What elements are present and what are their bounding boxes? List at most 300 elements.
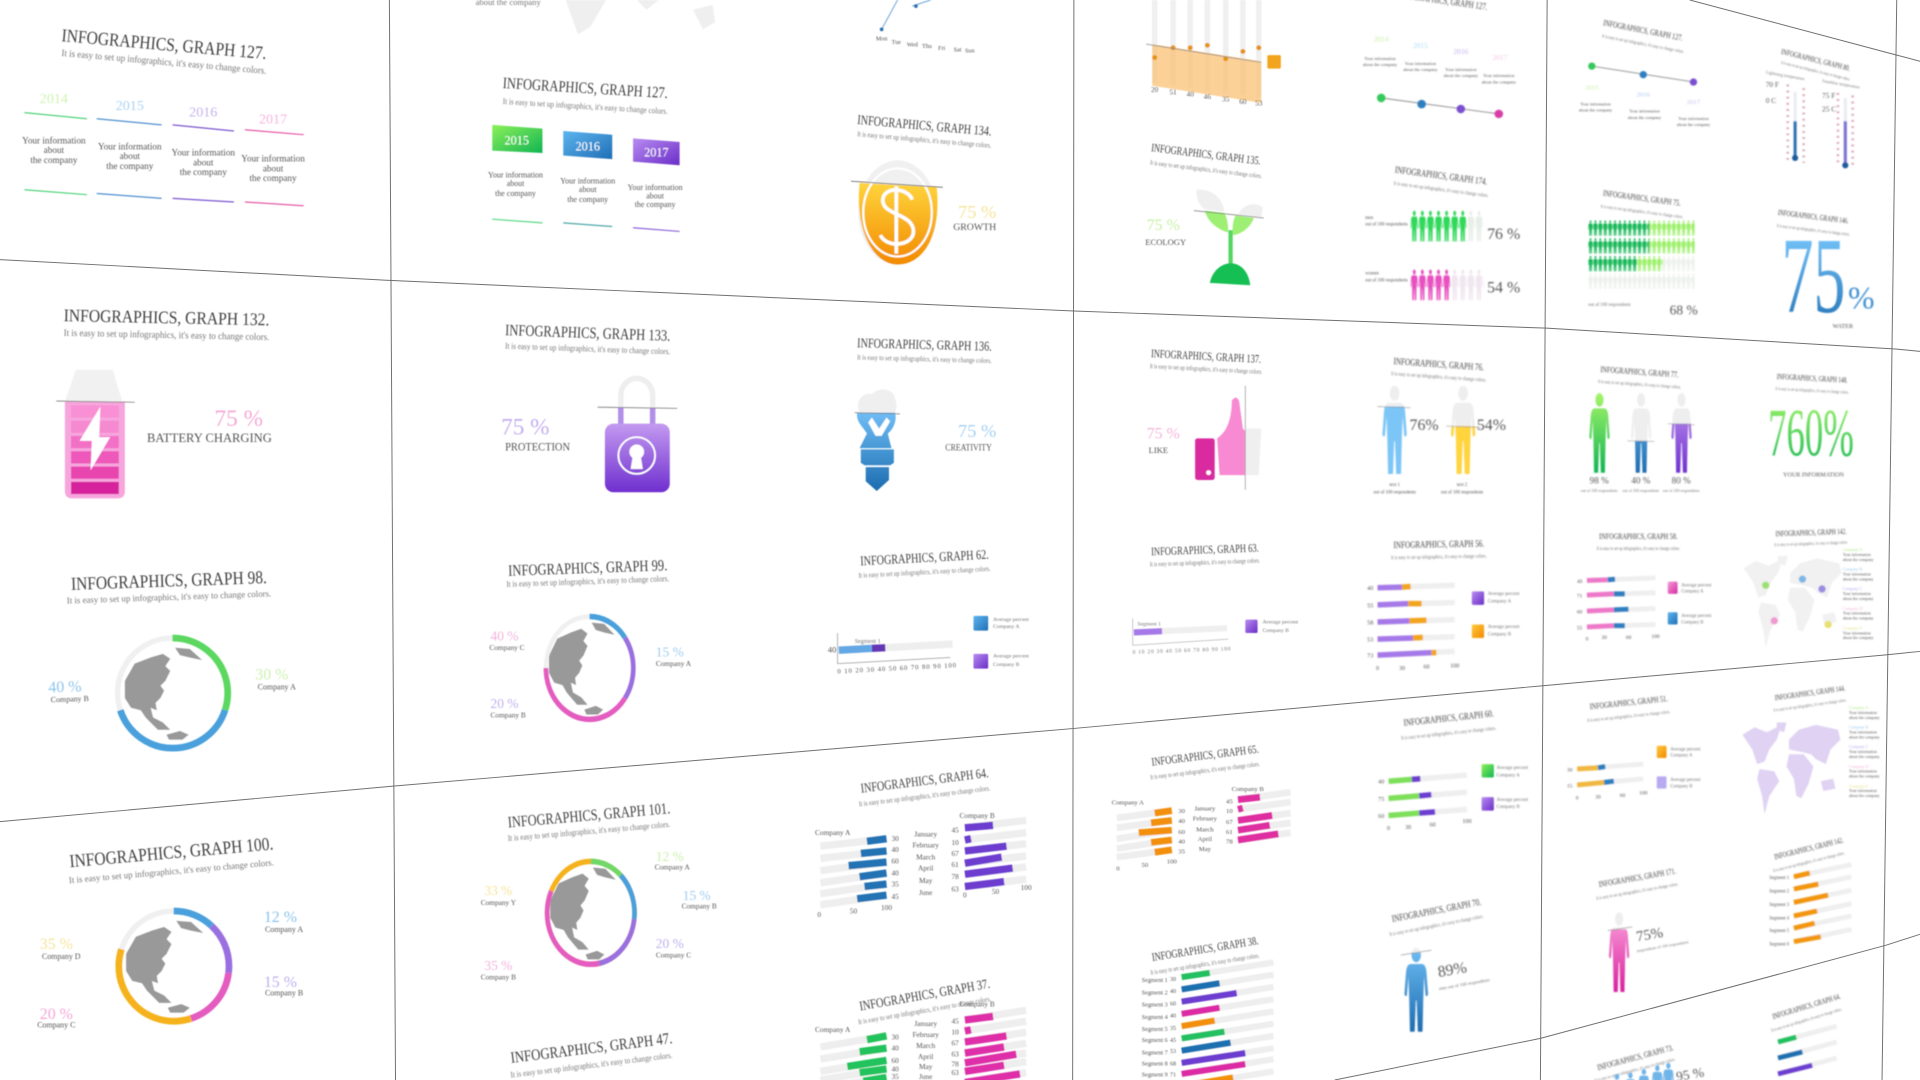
axis and value labels: 45 — [891, 892, 899, 901]
values and labels: 12 % — [656, 849, 684, 864]
axis labels: 75 — [1378, 797, 1384, 803]
panel: graph 134 coin — [851, 112, 996, 264]
chart: cropped line chart top: Tue — [892, 40, 901, 46]
panel: graph 132 battery — [56, 305, 272, 498]
subtitle: It is easy to set up infographics, it's easy to change colors. — [858, 564, 991, 580]
values and labels: Company C — [656, 951, 691, 960]
panel: graph 64 small bars — [1771, 992, 1843, 1074]
axis labels: 60 — [1378, 814, 1384, 820]
heading: INFOGRAPHICS, GRAPH 142. — [1773, 836, 1844, 861]
pale years: 2016 — [1637, 92, 1651, 99]
captions — [1373, 483, 1483, 495]
panel: graph 58 stacked bars — [1577, 531, 1712, 642]
data points — [1152, 43, 1261, 61]
values and labels: 35 % — [484, 958, 512, 973]
subtitle: It is easy to set up infographics, it's easy to change colors. — [1780, 60, 1851, 83]
panel: graph 133 padlock — [501, 322, 677, 492]
row labels: Segment 5 — [1142, 1027, 1168, 1033]
axis and value labels: 60 — [1178, 829, 1186, 836]
box captions: the company — [495, 189, 536, 198]
people: men 76 percent — [1411, 211, 1483, 242]
pale years — [1585, 84, 1701, 106]
heading: INFOGRAPHICS, GRAPH 142. — [1775, 527, 1847, 538]
legend: Average percent — [1681, 614, 1712, 619]
chart: cropped line chart top: Sat — [954, 47, 962, 53]
axis and value labels: January — [914, 1019, 937, 1028]
people row — [1611, 1063, 1674, 1080]
axis and value labels: 100 — [1021, 883, 1032, 892]
heading: INFOGRAPHICS, GRAPH 65. — [1151, 743, 1259, 769]
value: ecology: 75 % — [1147, 217, 1180, 234]
subtitle: It is easy to set up infographics, it's easy to change colors. — [1391, 553, 1487, 561]
axis and value labels: 50 — [992, 887, 1000, 896]
legend — [1482, 764, 1529, 811]
map legend: Company E — [1843, 625, 1863, 630]
axis and value labels: April — [1198, 836, 1212, 843]
axis and value labels: 100 — [881, 903, 892, 912]
axis and value labels: 10 — [1226, 808, 1233, 815]
orange area — [1152, 44, 1261, 103]
subtitle: It is easy to set up infographics, it's easy to change colors. — [857, 352, 992, 365]
values and captions: out of 100 respondents — [1663, 488, 1700, 493]
subtitle: It is easy to set up infographics, it's easy to change colors. — [510, 1050, 673, 1080]
information text: about — [193, 157, 214, 167]
axis labels — [1367, 586, 1459, 672]
bar chart: Segment 1 — [855, 639, 881, 645]
heading: INFOGRAPHICS, GRAPH 64. — [860, 765, 989, 796]
map legend: about the company — [1843, 635, 1874, 640]
row labels: Segment 3 — [1142, 1003, 1168, 1009]
panel: graph 142 orange bars — [1769, 836, 1851, 947]
value: 68 percent: 68 % — [1670, 303, 1698, 318]
legend: Company B — [993, 662, 1020, 668]
map legend: Company A — [1849, 705, 1868, 710]
values and labels: Company A — [655, 862, 691, 871]
panel: graph 74 people rows — [1365, 165, 1520, 301]
values and labels: 15 % — [264, 974, 297, 991]
legend: Average percent — [1488, 592, 1520, 597]
panel: graph 63 bar — [1133, 542, 1299, 656]
axis and value labels: 60 — [891, 1056, 899, 1065]
year labels: 2017 — [259, 112, 287, 128]
values and labels: 20 % — [40, 1006, 73, 1023]
axis labels: 40 — [1367, 586, 1373, 592]
captions: out of 100 respondents — [1441, 490, 1483, 495]
bar chart: orange — [1117, 811, 1172, 857]
legend: Company A — [1496, 773, 1520, 778]
axis and value labels: 30 — [1178, 808, 1186, 815]
heading: INFOGRAPHICS, GRAPH 174. — [1394, 165, 1488, 188]
heading: INFOGRAPHICS, GRAPH 132. — [63, 305, 270, 329]
panel: graph 144 purple map — [1742, 684, 1880, 814]
subtitle: It is easy to set up infographics, it's easy to change colors. — [1401, 725, 1497, 742]
value: company A: 30 % — [255, 667, 288, 684]
value: 75 percent: 75% — [1635, 925, 1664, 945]
map legend: Your information — [1849, 749, 1877, 754]
year labels: 2015 — [116, 98, 144, 114]
axis and value labels: 40 — [1178, 839, 1186, 846]
label: company A: Company A — [258, 682, 296, 691]
row labels: men — [1365, 216, 1374, 221]
axis labels: 40 — [1187, 90, 1194, 99]
axis labels: 53 — [1367, 638, 1373, 644]
map legend: Your information — [1843, 630, 1871, 635]
box captions: Your information — [628, 183, 683, 192]
heading: INFOGRAPHICS, GRAPH 137. — [1151, 347, 1261, 366]
information text — [22, 135, 305, 183]
axis and value labels: 40 — [891, 869, 899, 878]
heading: INFOGRAPHICS, GRAPH 70. — [1391, 897, 1482, 925]
value: 76 percent: 76% — [1409, 417, 1439, 434]
map legend: Company B — [1843, 567, 1863, 572]
subtitle: It is easy to set up infographics, it's easy to change colors. — [1774, 541, 1848, 548]
subtitle: It is easy to set up infographics, it's easy to change colors. — [1597, 547, 1680, 552]
legend: Company B — [1496, 805, 1521, 810]
figure: green person — [1589, 393, 1610, 473]
caption: men out of 100 respondents — [1439, 978, 1490, 992]
axis labels: 0 — [1576, 796, 1579, 802]
row labels: Segment 4 — [1142, 1015, 1168, 1021]
map legend: about the company — [1843, 576, 1874, 581]
map legend: about the company — [1843, 557, 1874, 562]
row labels: Segment 7 — [1142, 1050, 1168, 1056]
axis labels: 100 — [1462, 819, 1472, 825]
values and labels: 12 % — [264, 909, 297, 926]
map legend: about the company — [1849, 715, 1880, 720]
legend: Average percent — [1670, 748, 1701, 753]
label: protection: PROTECTION — [505, 441, 571, 454]
value: creativity: 75 % — [958, 421, 996, 441]
axis and value labels: 61 — [1226, 829, 1233, 836]
bar chart: 0 10 20 30 40 50 60 70 80 90 100 — [1133, 646, 1231, 656]
axis labels: 51 — [1169, 87, 1177, 96]
map legend: Your information — [1843, 572, 1871, 577]
pale years: 2015 — [1413, 41, 1428, 50]
axis and value labels: 63 — [951, 1068, 959, 1077]
subtitle: It is easy to set up infographics, it's easy to change colors. — [1150, 952, 1260, 977]
axis and value labels: 0 — [1116, 866, 1120, 873]
year boxes: 2015 — [505, 133, 529, 147]
values and labels: 15 % — [656, 644, 684, 659]
information text: Your information — [171, 148, 235, 158]
axis and value labels: 40 — [891, 845, 899, 854]
subtitle: It is easy to set up infographics, it's easy to change colors. — [1150, 363, 1263, 376]
panel: graph 127 coloured boxes — [488, 75, 683, 223]
panel: graph 37 double bars — [815, 976, 1026, 1080]
axis and value labels: March — [916, 853, 936, 862]
subtitle: It is easy to set up infographics, it's easy to change colors. — [68, 857, 274, 885]
values and labels: Company A — [656, 659, 692, 668]
axis and value labels: 10 — [951, 838, 959, 847]
row labels: out of 100 respondents — [1365, 279, 1408, 284]
bar chart: 0 10 20 30 40 50 60 70 80 90 100 — [837, 662, 957, 675]
information text: Your information — [98, 141, 162, 151]
legend — [1668, 582, 1712, 625]
bar chart: 40 — [828, 645, 836, 655]
information text: about — [120, 151, 140, 161]
heading: INFOGRAPHICS, GRAPH 127. — [502, 75, 668, 102]
captions: Your information — [1678, 116, 1709, 121]
heading: INFOGRAPHICS, GRAPH 100. — [69, 833, 274, 871]
right thermometer — [1822, 78, 1860, 169]
bar chart — [1577, 764, 1643, 785]
box captions: about — [507, 179, 525, 188]
panel: graph 73 people — [1594, 1042, 1705, 1080]
axis and value labels: January — [1194, 806, 1216, 813]
captions: Your information — [1483, 73, 1515, 78]
bar chart — [1182, 962, 1273, 1080]
row labels: 71 — [1170, 1072, 1176, 1078]
legend: Average percent — [1496, 766, 1529, 771]
axis and value labels: 50 — [850, 906, 857, 915]
axis labels: 30 — [1567, 767, 1573, 773]
captions: text 1 — [1389, 483, 1401, 488]
subtitle: It is easy to set up infographics, it's easy to change colors. — [67, 588, 271, 606]
values and captions: 80 % — [1672, 476, 1691, 486]
axis and value labels: February — [912, 1030, 939, 1039]
subtitle: It is easy to set up infographics, it's easy to change colors. — [858, 783, 991, 808]
figure: pink person — [1608, 912, 1632, 992]
year boxes: 2016 — [576, 140, 600, 154]
heading: INFOGRAPHICS, GRAPH 76. — [1393, 356, 1484, 373]
heading: INFOGRAPHICS, GRAPH 133. — [505, 322, 671, 345]
map legend: Your information — [1849, 710, 1877, 715]
row labels: Segment 9 — [1142, 1072, 1168, 1078]
bar chart: magenta — [1238, 792, 1291, 840]
heading: INFOGRAPHICS, GRAPH 144. — [1774, 684, 1846, 702]
information text: the company — [180, 167, 227, 177]
row labels: 40 — [1170, 1014, 1176, 1020]
values and labels: 15 % — [683, 888, 711, 903]
captions: text 2 — [1457, 483, 1468, 488]
panel: graph 99 globe — [489, 557, 692, 720]
value: 76 percent: 76 % — [1487, 226, 1520, 243]
map legend: Company C — [1849, 744, 1869, 749]
subtitle: It is easy to set up infographics, it's easy to change colors. — [1150, 761, 1260, 781]
axis labels: 0 — [1586, 636, 1589, 642]
axis labels: 20 — [1151, 85, 1159, 94]
chart: cropped line chart top: Sun — [965, 49, 975, 55]
captions: Your information — [1364, 56, 1396, 61]
heading: INFOGRAPHICS, GRAPH 56. — [1393, 539, 1484, 551]
axis labels: 100 — [1450, 663, 1459, 669]
timeline — [1377, 94, 1503, 118]
axis and value labels: March — [916, 1041, 936, 1050]
row labels: 60 — [1170, 1001, 1176, 1007]
bar chart: company B — [965, 820, 1026, 887]
captions: about the company — [1363, 62, 1398, 67]
heading: INFOGRAPHICS, GRAPH 51. — [1589, 693, 1668, 711]
captions: Your information — [1629, 109, 1660, 114]
map legend: Company D — [1849, 764, 1869, 769]
values and labels: Company B — [491, 711, 526, 720]
row labels: Segment 1 — [1142, 978, 1168, 984]
legend: Average percent — [993, 654, 1029, 660]
panel: graph 136 bulb — [855, 335, 996, 491]
heading: INFOGRAPHICS, GRAPH 58. — [1599, 531, 1678, 541]
panel: graph 100 globe — [37, 833, 303, 1029]
axis and value labels: February — [912, 840, 939, 849]
axis and value labels: Company B — [1232, 786, 1264, 793]
information text: Your information — [241, 154, 305, 164]
figure: blue person — [1378, 386, 1411, 474]
heading: INFOGRAPHICS, GRAPH 134. — [857, 112, 992, 139]
subtitle: It is easy to set up infographics, it's easy to change colors. — [502, 96, 668, 116]
axis and value labels: Company A — [1112, 799, 1144, 806]
panel: graph 135 plant — [1145, 141, 1264, 285]
heading: INFOGRAPHICS, GRAPH 38. — [1151, 934, 1259, 964]
panel: graph 60 stacked bars — [1378, 709, 1529, 832]
panel: timeline four dots — [1363, 0, 1517, 118]
heading: INFOGRAPHICS, GRAPH 171. — [1598, 866, 1677, 889]
map legend: Company E — [1849, 783, 1869, 788]
bar chart: Segment 1 — [1138, 622, 1161, 628]
panel: graph 148 big value — [1768, 372, 1854, 478]
pale years: 2016 — [1453, 47, 1468, 56]
subtitle: graph 127: It is easy to set up infographics, it's easy to change colors. — [61, 48, 267, 77]
people: women 54 percent — [1411, 269, 1484, 301]
map legend: about the company — [1849, 734, 1880, 739]
chart: cropped line chart top — [876, 0, 975, 55]
big value: 75: 75 — [1782, 217, 1845, 336]
label: water: WATER — [1833, 324, 1854, 330]
value: battery charging: 75 % — [215, 406, 263, 432]
map legend: Company A — [1843, 547, 1862, 552]
axis labels — [1151, 85, 1263, 107]
subtitle: It is easy to set up infographics, it's easy to change colors. — [1587, 710, 1670, 724]
subtitle: It is easy to set up infographics, it's easy to change colors. — [1602, 34, 1684, 55]
axis and value labels: 40 — [891, 1044, 899, 1053]
panel: graph 127 three dots — [1579, 17, 1711, 127]
axis and value labels: 30 — [891, 834, 899, 843]
vertical tracks — [1155, 0, 1259, 98]
information text: the company — [30, 155, 78, 165]
axis labels: 100 — [1651, 634, 1660, 640]
subtitle: It is easy to set up infographics, it's easy to change colors. — [1775, 387, 1849, 396]
map legend: about the company — [1849, 793, 1880, 798]
axis and value labels: Company A — [815, 828, 851, 837]
icon: padlock — [598, 378, 677, 492]
label: creativity: CREATIVITY — [945, 443, 992, 454]
figure: blue person — [1401, 948, 1431, 1032]
map legend: about the company — [1849, 754, 1880, 759]
caption: respondents of 100 respondents — [1636, 939, 1689, 953]
axis and value labels: May — [919, 1062, 933, 1071]
subtitle: It is easy to set up infographics, it's easy to change colors. — [64, 328, 269, 343]
heading: INFOGRAPHICS, GRAPH 80. — [1780, 47, 1851, 73]
axis and value labels: 35 — [891, 880, 899, 889]
bar chart — [1389, 775, 1467, 816]
map legend: Company B — [1849, 725, 1869, 730]
percent sign: % — [1848, 281, 1874, 316]
information text: about — [263, 163, 284, 173]
panel: graph 75 people grid — [1588, 188, 1698, 318]
icon: sprout — [1194, 190, 1264, 285]
year labels: 2016 — [189, 104, 217, 120]
axis and value labels: 61 — [951, 860, 959, 869]
bar chart — [1133, 618, 1231, 656]
subtitle: It is easy to set up infographics, it's easy to change colors. — [1150, 160, 1263, 180]
axis labels: 60 — [1577, 609, 1583, 615]
panel: graph 76 figures — [1373, 356, 1506, 495]
axis labels: 60 — [1626, 635, 1632, 641]
chart: cropped line chart top: Fri — [938, 46, 945, 52]
map legend: Company C — [1843, 586, 1863, 591]
figure: blue person — [1627, 393, 1654, 473]
box captions: Your information — [560, 177, 615, 186]
map legend: Your information — [1843, 591, 1871, 596]
map legend: about the company — [1843, 616, 1874, 621]
right thermometer: Sunshine temperature — [1822, 78, 1860, 90]
panel: graph 56 stacked bars — [1367, 539, 1520, 672]
legend: Average percent — [1670, 778, 1701, 783]
row labels: Segment 3 — [1769, 903, 1790, 908]
captions: Your information — [1580, 101, 1612, 106]
axis and value labels: 45 — [951, 826, 959, 835]
axis labels: 60 — [1239, 97, 1247, 106]
axis labels: 60 — [1620, 793, 1625, 799]
captions: about the company — [1403, 67, 1438, 72]
row labels — [1365, 216, 1408, 284]
map legend: Company D — [1843, 606, 1863, 611]
label: company B: Company B — [51, 694, 89, 704]
chart: cropped line chart top: Mon — [876, 36, 887, 42]
map legend: Your information — [1849, 788, 1877, 793]
legend — [1245, 619, 1299, 634]
axis labels: 60 — [1423, 665, 1430, 671]
panel: graph 70 figure — [1389, 897, 1490, 1032]
row labels: Segment 2 — [1769, 890, 1790, 895]
bottom rules — [492, 219, 542, 223]
subtitle: It is easy to set up infographics, it's easy to change colors. — [1598, 380, 1681, 391]
bar chart: company B — [965, 1010, 1026, 1080]
axis labels — [1577, 579, 1660, 642]
values and labels — [481, 849, 717, 982]
row labels: 68 — [1170, 1061, 1176, 1067]
box captions: the company — [635, 200, 676, 209]
value: company B: 40 % — [48, 678, 82, 696]
row labels: Segment 6 — [1142, 1038, 1168, 1044]
axis and value labels: 60 — [891, 856, 899, 865]
legend: Company B — [1670, 784, 1693, 789]
left thermometer: Lightning temperature — [1766, 70, 1805, 81]
box captions — [488, 171, 683, 209]
orange tag — [1267, 55, 1281, 69]
legend: Average percent — [993, 617, 1029, 623]
pale years: 2015 — [1585, 84, 1599, 91]
left thermometer: 70 F — [1766, 80, 1779, 89]
values and labels: Company A — [265, 925, 303, 934]
axis and value labels: May — [1199, 846, 1212, 853]
map legend: Your information — [1849, 729, 1877, 734]
box captions: the company — [567, 195, 608, 204]
row labels: Segment 5 — [1769, 929, 1790, 934]
value: 54 percent: 54 % — [1487, 280, 1520, 297]
axis labels: 71 — [1577, 594, 1583, 600]
captions: about the company — [1444, 73, 1479, 78]
axis and value labels: 67 — [951, 849, 959, 858]
captions: Your information — [1405, 61, 1437, 66]
axis labels: 35 — [1222, 95, 1230, 104]
panel: graph 38 bars — [1142, 934, 1273, 1080]
heading: INFOGRAPHICS, GRAPH 148. — [1776, 372, 1848, 385]
axis labels: 55 — [1367, 603, 1373, 609]
panel: graph 64 double bars — [815, 765, 1032, 919]
heading: graph 127: INFOGRAPHICS, GRAPH 127. — [61, 25, 267, 63]
row labels: 30 — [1170, 977, 1176, 983]
axis labels: 30 — [1405, 825, 1411, 831]
figure: purple person — [1668, 393, 1695, 473]
